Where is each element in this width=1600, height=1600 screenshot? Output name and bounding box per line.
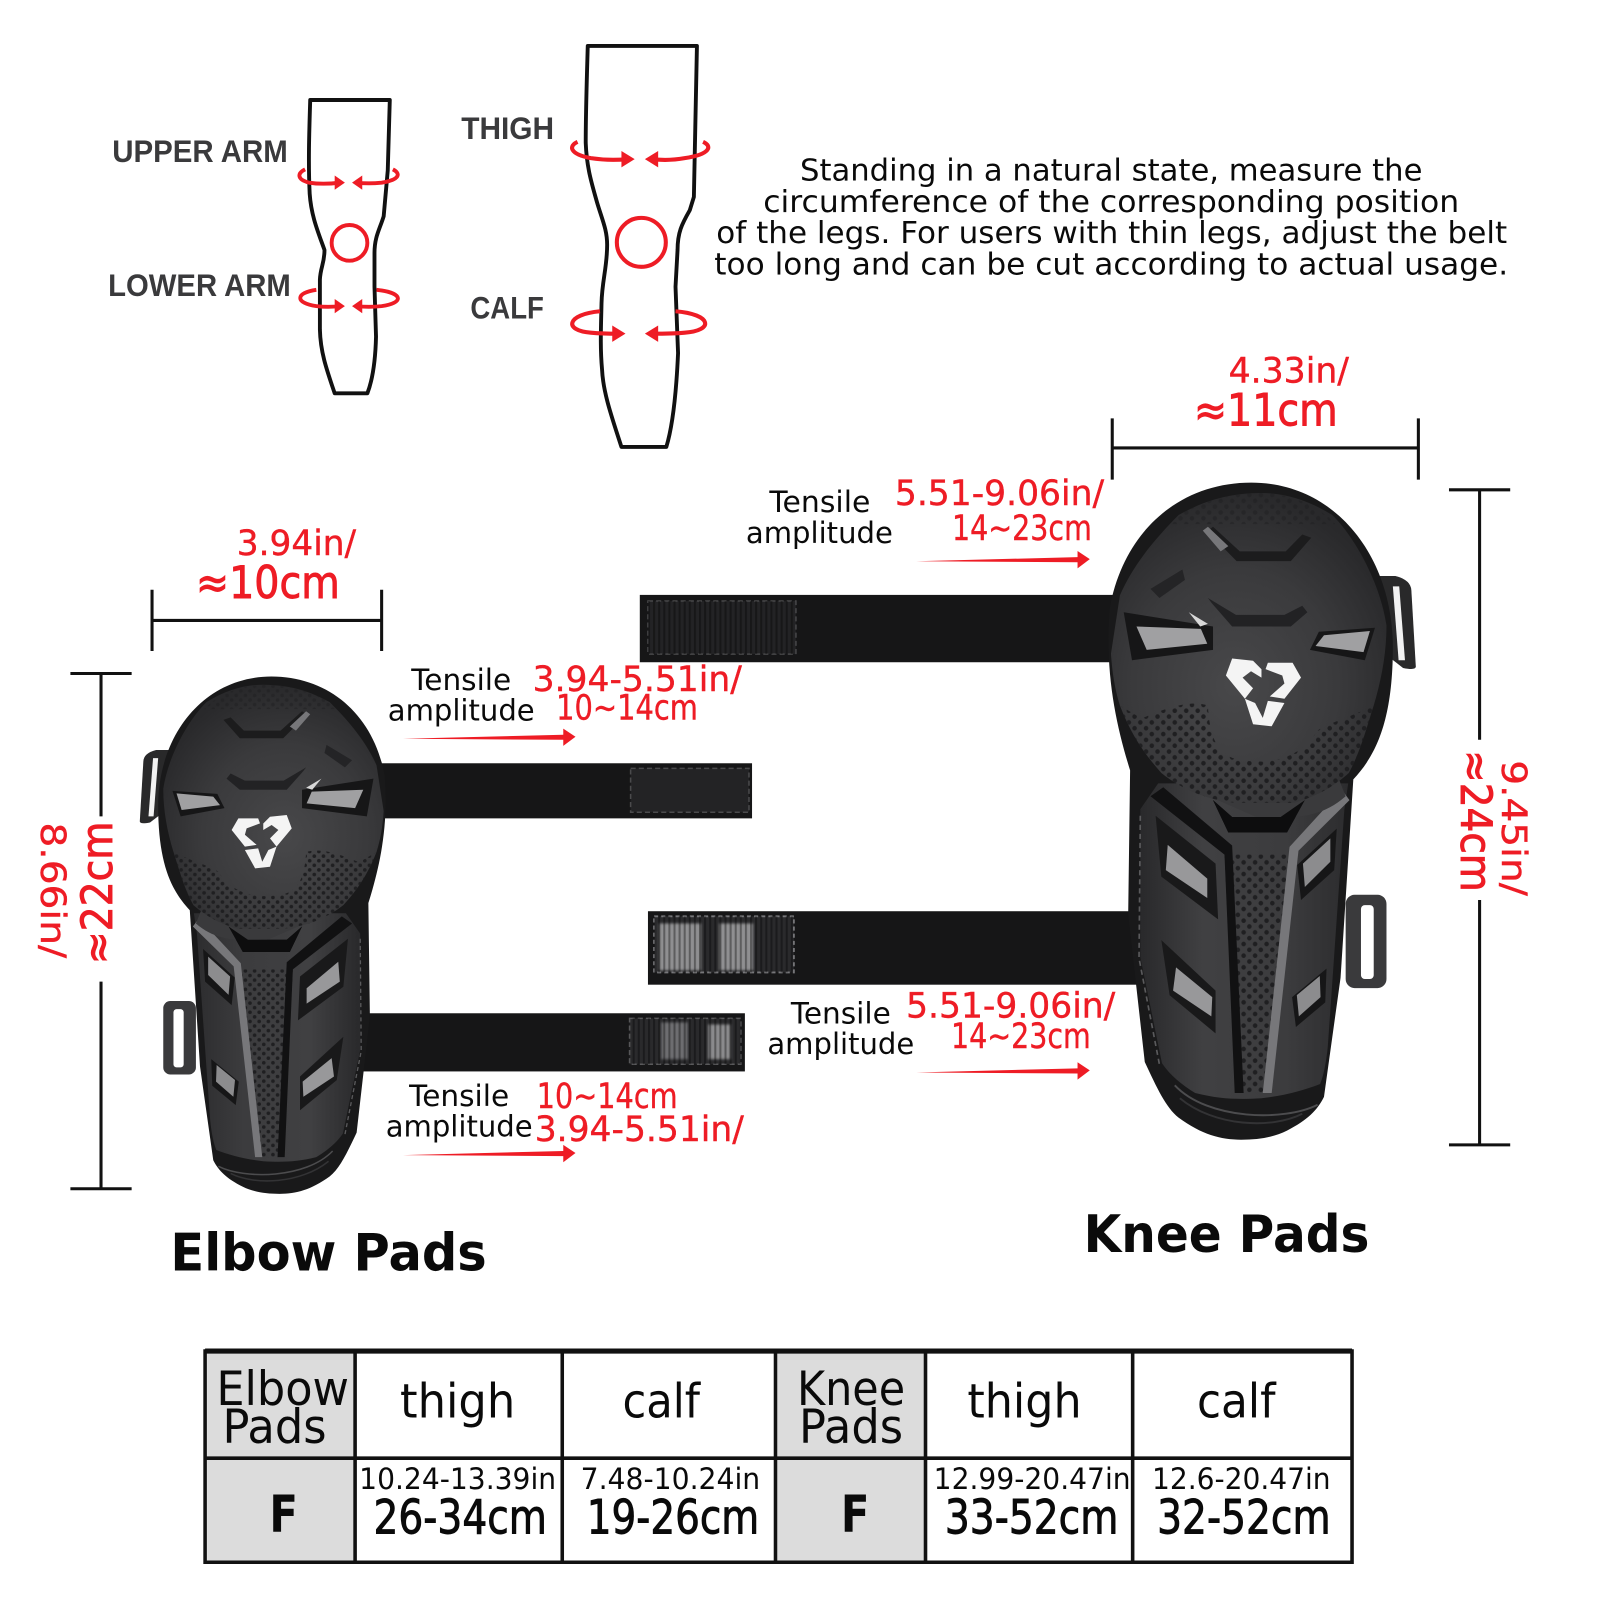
knee width dimension: ≈11cm — [1194, 384, 1338, 437]
diagram: leg measuring figure — [572, 46, 708, 447]
callout: elbow lower tensile amplitude: 10~14cm — [537, 1077, 678, 1117]
elbow pad photo illustration — [140, 677, 386, 1194]
instruction text block: Standing in a natural state, measure the — [800, 154, 1422, 189]
elbow width dimension: 3.94in/ — [237, 524, 356, 564]
diagram: arm measuring figure — [299, 100, 398, 393]
callout: knee upper tensile amplitude: Tensile — [768, 485, 870, 519]
instruction text block: circumference of the corresponding position — [763, 185, 1459, 220]
callout: elbow lower tensile amplitude — [386, 1077, 744, 1162]
size table: Pads — [799, 1400, 903, 1455]
elbow strap: upper — [378, 763, 752, 818]
label: lower arm: LOWER ARM — [108, 267, 291, 303]
size table: Pads — [222, 1400, 327, 1455]
heading: Knee Pads: Knee Pads — [1084, 1205, 1369, 1265]
instruction text block: too long and can be cut according to actual usage. — [714, 247, 1508, 282]
size table: thigh — [400, 1374, 515, 1429]
knee pad photo illustration — [1108, 483, 1416, 1140]
knee width dimension: 4.33in/ — [1229, 352, 1349, 392]
size table — [205, 1351, 1352, 1562]
callout: knee lower tensile amplitude: 5.51-9.06in/ — [906, 986, 1116, 1026]
elbow height dimension: 8.66in/ — [32, 822, 72, 959]
elbow width dimension: ≈10cm — [196, 556, 340, 609]
callout: knee upper tensile amplitude — [746, 474, 1104, 568]
size table: F — [269, 1486, 298, 1545]
callout: knee lower tensile amplitude — [767, 986, 1116, 1080]
callout: elbow upper tensile amplitude: amplitude — [388, 693, 535, 727]
callout: knee upper tensile amplitude: amplitude — [746, 516, 893, 550]
size table: 32-52cm — [1157, 1491, 1331, 1546]
size table: 7.48-10.24in — [581, 1462, 760, 1496]
elbow height dimension: ≈22cm — [73, 821, 123, 964]
knee height dimension: 9.45in/ — [1493, 760, 1533, 896]
label: upper arm: UPPER ARM — [112, 133, 288, 169]
elbow height dimension — [32, 673, 132, 1189]
instruction text block: of the legs. For users with thin legs, adjust the belt — [716, 216, 1507, 251]
size table: F — [841, 1486, 869, 1545]
elbow width dimension — [152, 524, 382, 651]
knee strap: upper — [640, 595, 1119, 662]
size table: calf — [622, 1374, 701, 1429]
elbow strap: lower — [362, 1013, 745, 1071]
size table: thigh — [967, 1374, 1082, 1429]
callout: elbow lower tensile amplitude: Tensile — [408, 1079, 509, 1113]
size table: 19-26cm — [587, 1491, 759, 1546]
callout: elbow upper tensile amplitude — [388, 660, 742, 746]
knee height dimension: ≈24cm — [1450, 750, 1500, 892]
callout: knee lower tensile amplitude: 14~23cm — [951, 1017, 1091, 1057]
knee height dimension — [1449, 490, 1533, 1145]
size table: 26-34cm — [373, 1491, 547, 1546]
label: thigh: THIGH — [461, 110, 554, 146]
callout: elbow upper tensile amplitude: 10~14cm — [556, 688, 698, 728]
callout: elbow upper tensile amplitude: 3.94-5.51in/ — [533, 660, 742, 700]
callout: elbow lower tensile amplitude: amplitude — [386, 1110, 533, 1144]
knee width dimension — [1112, 352, 1418, 480]
callout: elbow upper tensile amplitude: Tensile — [410, 663, 511, 697]
size table: 12.99-20.47in — [934, 1462, 1131, 1496]
size table: calf — [1197, 1374, 1277, 1429]
knee strap: lower — [648, 911, 1138, 985]
callout: knee lower tensile amplitude: Tensile — [790, 996, 891, 1030]
size table: 12.6-20.47in — [1152, 1462, 1331, 1496]
callout: knee upper tensile amplitude: 14~23cm — [952, 509, 1092, 549]
instruction text block — [714, 154, 1508, 282]
size table: Elbow — [216, 1362, 349, 1417]
callout: knee upper tensile amplitude: 5.51-9.06in/ — [895, 474, 1104, 514]
size table: 33-52cm — [945, 1491, 1118, 1546]
heading: Elbow Pads: Elbow Pads — [170, 1223, 487, 1283]
size table: Knee — [797, 1362, 905, 1417]
size table: 10.24-13.39in — [359, 1462, 556, 1496]
callout: knee lower tensile amplitude: amplitude — [767, 1027, 914, 1061]
label: calf: CALF — [470, 289, 544, 325]
callout: elbow lower tensile amplitude: 3.94-5.51in/ — [535, 1110, 744, 1150]
